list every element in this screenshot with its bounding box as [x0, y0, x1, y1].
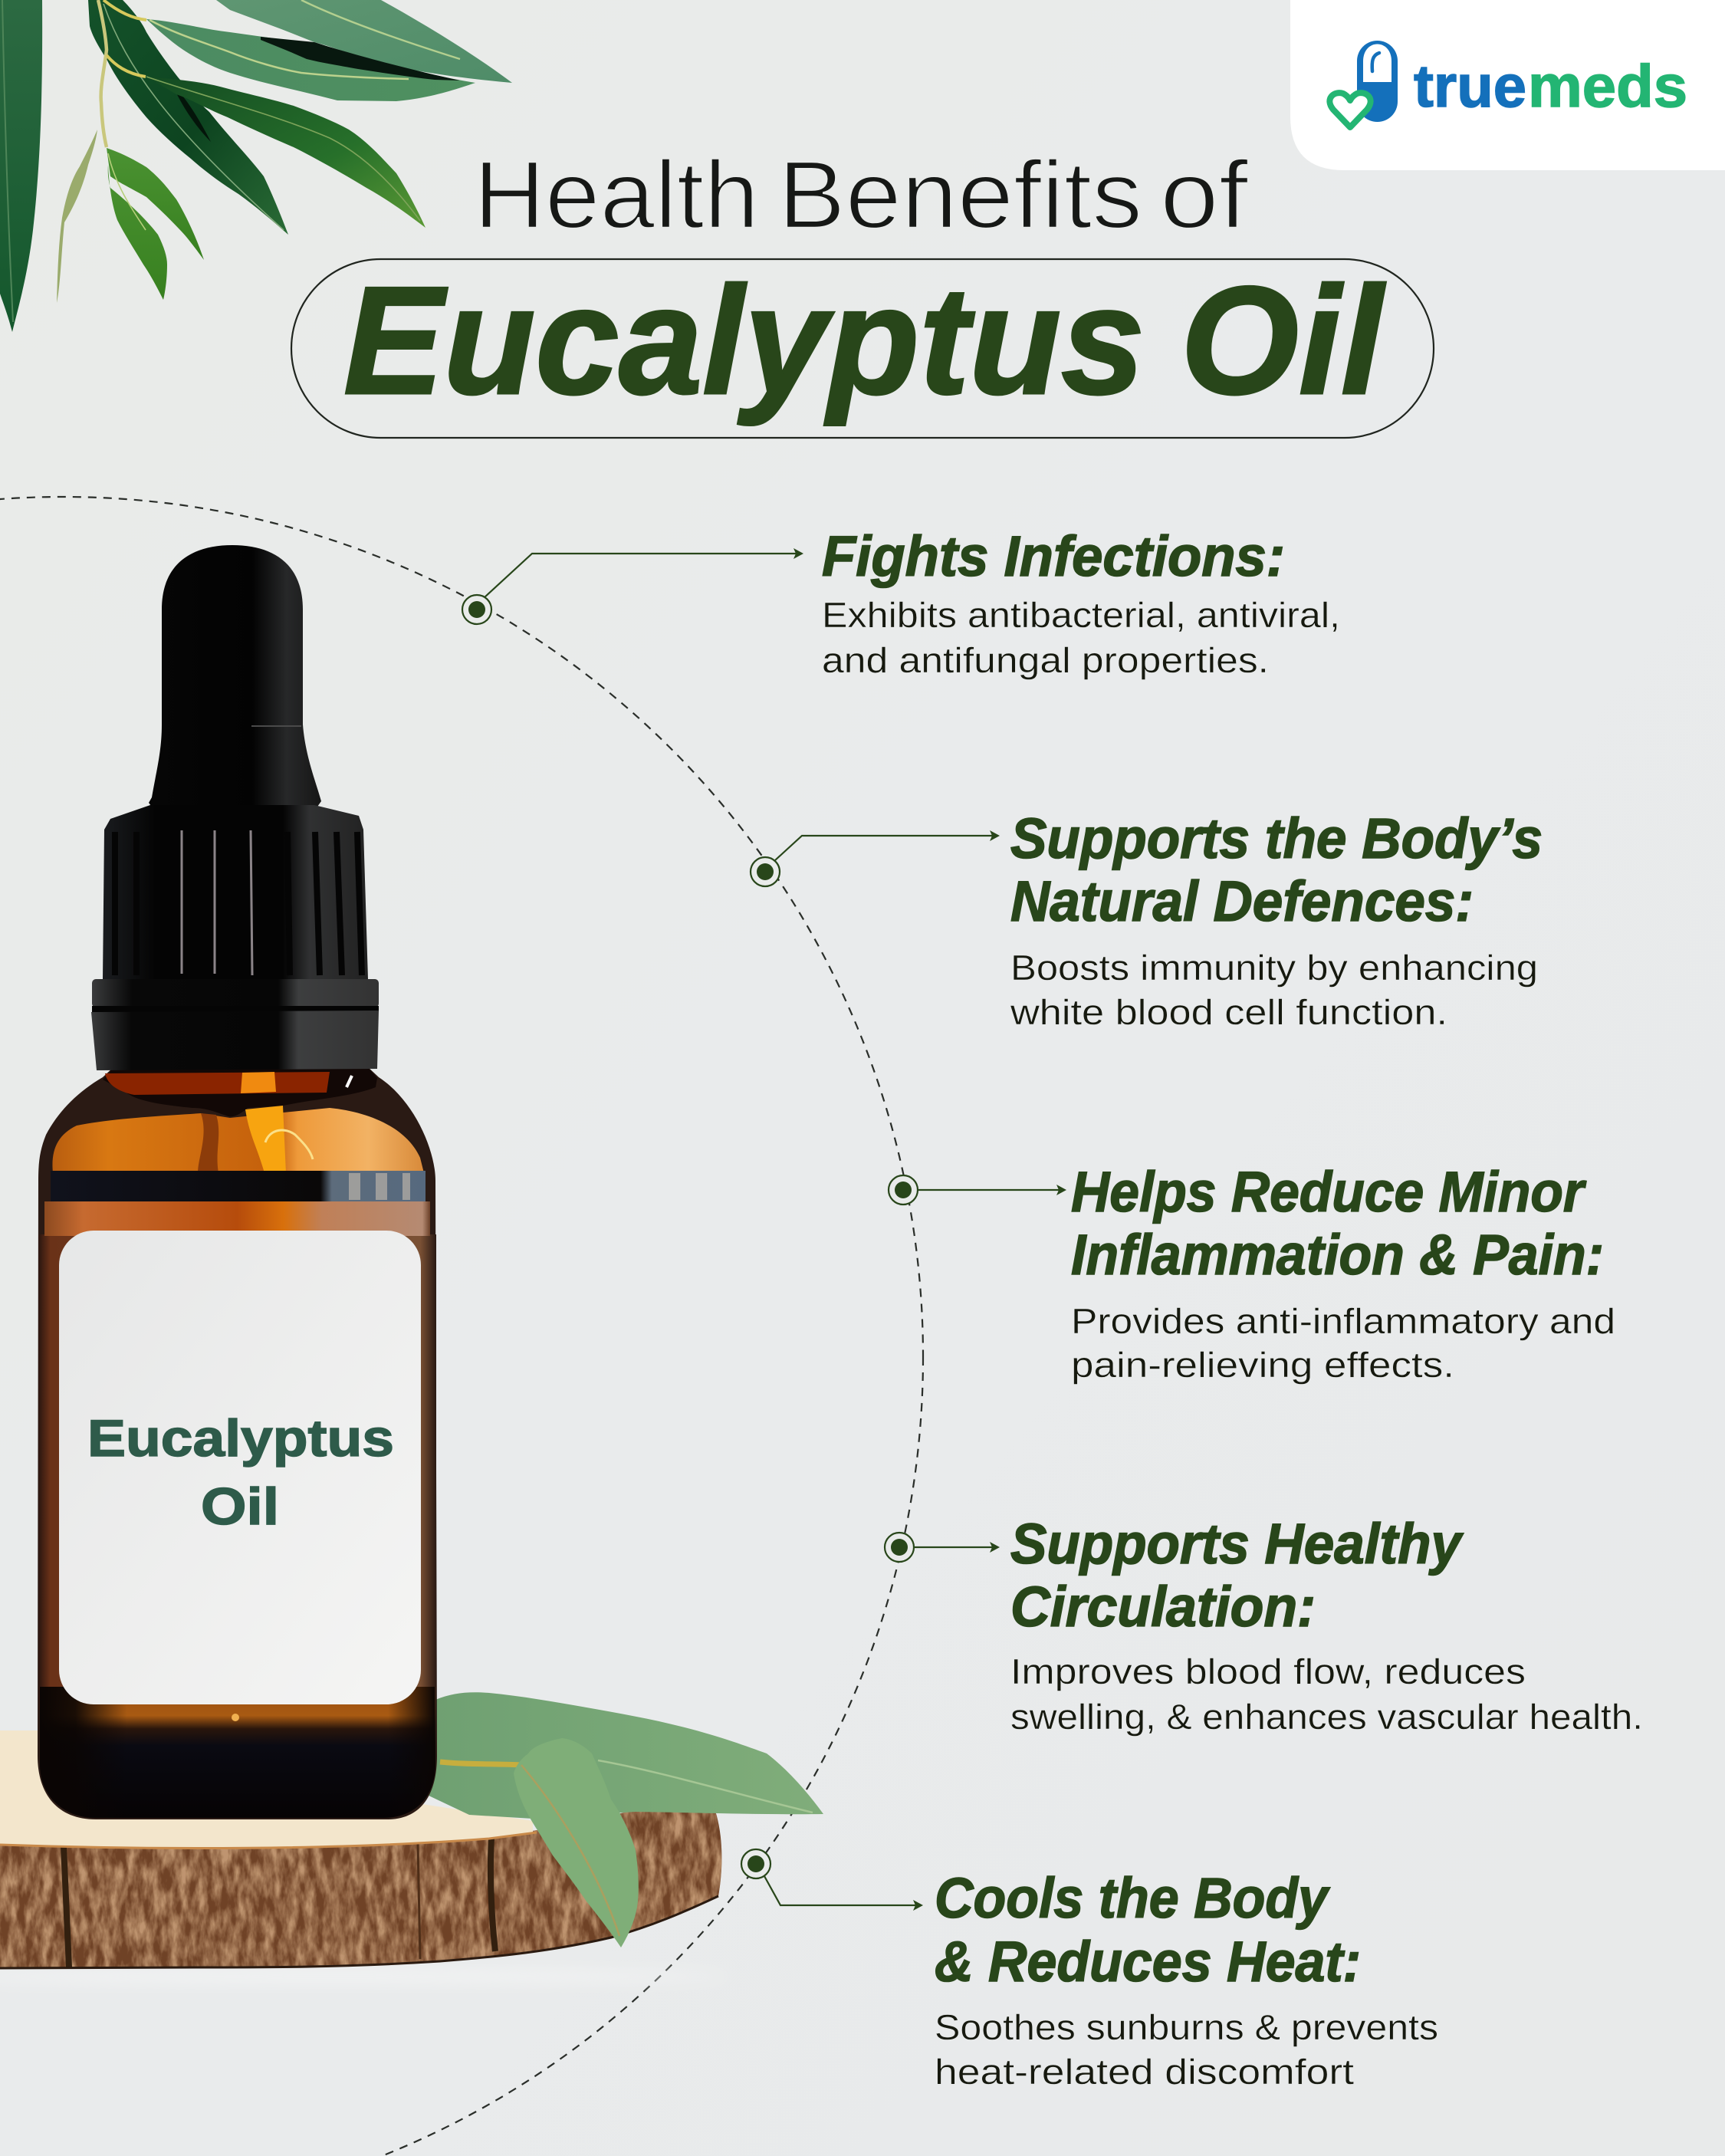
title line: Health — [474, 142, 759, 248]
neck highlight — [105, 1072, 330, 1095]
benefit 4: healthy circulation — [885, 1512, 1643, 1737]
marker — [741, 1849, 770, 1878]
connector arrow — [775, 830, 1000, 860]
dark band — [51, 1171, 426, 1201]
side glass behind label — [38, 1234, 436, 1710]
benefit text: & Reduces Heat: — [935, 1930, 1361, 1993]
icon: heart — [1329, 93, 1371, 127]
benefit text: Boosts immunity by enhancing — [1010, 948, 1538, 988]
upper oil colour — [52, 1108, 424, 1173]
benefit text: pain-relieving effects. — [1071, 1345, 1454, 1385]
connector arrow — [485, 548, 803, 597]
connector arrow — [918, 1185, 1066, 1195]
heading: Eucalyptus Oil: Oil — [1181, 255, 1385, 426]
benefit text — [935, 1866, 1438, 2092]
label text: Oil — [201, 1477, 279, 1536]
heading: Eucalyptus Oil: Eucalyptus — [343, 255, 1145, 426]
marker — [462, 595, 491, 624]
benefit text: and antifungal properties. — [822, 640, 1269, 680]
wood slice — [0, 1730, 728, 1982]
benefit 5: cools the body — [741, 1849, 1438, 2092]
mid glass above label — [44, 1201, 430, 1236]
benefit text: white blood cell function. — [1010, 992, 1447, 1032]
ribbed collar — [103, 805, 368, 979]
benefit text: swelling, & enhances vascular health. — [1010, 1697, 1643, 1737]
title line: Benefits — [778, 142, 1142, 248]
lower rings — [92, 979, 379, 1007]
logo panel — [1290, 0, 1725, 170]
bottle label — [59, 1231, 421, 1704]
dropper bulb — [149, 545, 321, 809]
logo wordmark — [1414, 52, 1687, 120]
benefit text: Cools the Body — [935, 1866, 1331, 1930]
benefit text: Circulation: — [1010, 1575, 1316, 1638]
marker — [889, 1175, 918, 1205]
benefit text: Helps Reduce Minor — [1071, 1160, 1587, 1224]
label text — [87, 1409, 394, 1536]
connector arrow — [914, 1542, 1000, 1553]
logo wordmark: true — [1414, 52, 1526, 120]
eucalyptus leaves, top left — [0, 0, 512, 332]
eucalyptus leaf in front — [514, 1738, 639, 1947]
benefit text — [1010, 1512, 1643, 1737]
title line: of — [1160, 142, 1248, 248]
dashed arc — [0, 497, 923, 2156]
amber glass bottle — [38, 1066, 437, 1819]
benefit text: heat-related discomfort — [935, 2052, 1354, 2092]
marker — [751, 857, 780, 886]
lower glass — [40, 1687, 435, 1818]
benefit text: Provides anti-inflammatory and — [1071, 1301, 1615, 1341]
glass body — [38, 1066, 437, 1819]
reflections — [245, 1106, 286, 1173]
icon: capsule — [1357, 41, 1398, 122]
connector arrow — [764, 1876, 923, 1911]
benefit text: Supports the Body’s — [1010, 807, 1543, 870]
label text: Eucalyptus — [87, 1409, 394, 1467]
benefit text — [822, 524, 1340, 680]
benefit text — [1071, 1160, 1615, 1385]
marker — [885, 1533, 914, 1562]
benefit 3: inflammation and pain — [889, 1160, 1615, 1385]
benefit text: Improves blood flow, reduces — [1010, 1652, 1526, 1691]
dropper cap — [91, 545, 379, 1070]
sage leaf behind — [426, 1692, 823, 1819]
title line — [474, 142, 1248, 248]
title pill — [291, 255, 1434, 438]
benefit text: Natural Defences: — [1010, 869, 1474, 933]
benefit 1: fights infections — [462, 524, 1340, 680]
logo wordmark: meds — [1528, 52, 1687, 120]
dark collar under neck — [103, 1066, 377, 1116]
benefit text: Supports Healthy — [1010, 1512, 1464, 1576]
benefit 2: natural defences — [751, 807, 1543, 1032]
benefit text: Inflammation & Pain: — [1071, 1223, 1604, 1287]
benefit text: Soothes sunburns & prevents — [935, 2007, 1438, 2047]
benefit text — [1010, 807, 1543, 1032]
benefit text: Exhibits antibacterial, antiviral, — [822, 595, 1340, 635]
benefit text: Fights Infections: — [822, 524, 1285, 588]
